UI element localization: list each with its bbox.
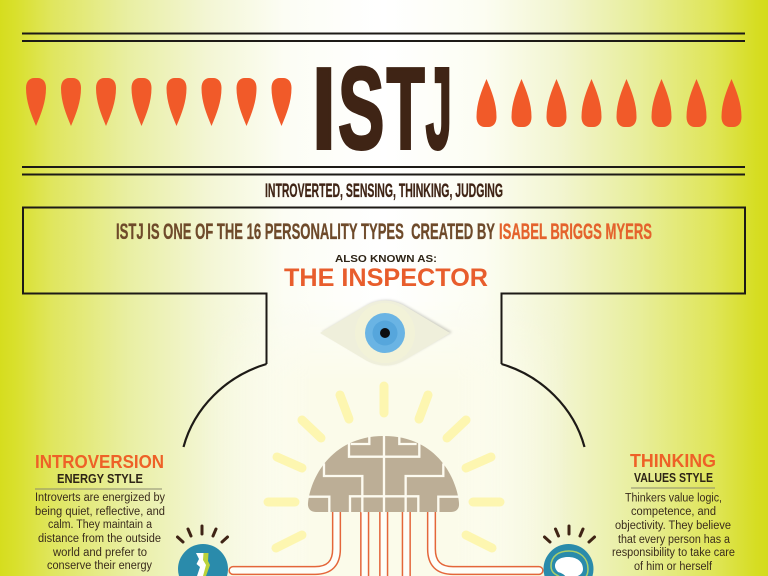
- intro sentence: ISTJ IS ONE OF THE 16 PERSONALITY TYPES CREATED BY: [116, 219, 495, 244]
- the inspector heading: THE INSPECTOR: [284, 264, 488, 292]
- brain glow rays: [268, 386, 500, 548]
- icon: circuit brain: [308, 436, 459, 512]
- icon: lightning bulb: [178, 526, 228, 576]
- title: S: [338, 44, 384, 174]
- icon: eye: [320, 300, 452, 366]
- thinking description: competence, and: [631, 506, 716, 518]
- introversion description: conserve their energy: [47, 560, 152, 572]
- introversion description: calm. They maintain a: [48, 519, 153, 531]
- introversion description: Introverts are energized by: [35, 492, 165, 504]
- thinking description: objectivity. They believe: [615, 520, 731, 532]
- energy style subheading: ENERGY STYLE: [57, 472, 143, 486]
- left row of orange drops: [26, 78, 292, 126]
- introversion description: world and prefer to: [52, 547, 147, 559]
- icon: thinking head: [544, 526, 594, 576]
- also known as label: ALSO KNOWN AS:: [335, 254, 437, 265]
- thinking description: [612, 492, 735, 573]
- top double rule: [22, 34, 745, 41]
- right row of orange drops: [476, 79, 742, 127]
- thinking description: of him or herself: [634, 561, 713, 573]
- introversion description: being quiet, reflective, and: [35, 506, 165, 518]
- intro sentence: ISABEL BRIGGS MYERS: [499, 219, 652, 244]
- title: [312, 44, 452, 174]
- outlined frame: [23, 208, 745, 447]
- subtitle: INTROVERTED, SENSING, THINKING, JUDGING: [265, 181, 503, 202]
- panel: introversion: [35, 452, 165, 572]
- title: T: [386, 44, 425, 173]
- thinking description: Thinkers value logic,: [625, 492, 722, 504]
- values style subheading: VALUES STYLE: [634, 471, 713, 485]
- thinking description: responsibility to take care: [612, 547, 735, 559]
- introversion description: distance from the outside: [38, 533, 161, 545]
- lower double rule: [22, 167, 745, 174]
- thinking description: that every person has a: [618, 534, 731, 546]
- introversion description: [35, 492, 165, 572]
- thinking heading: THINKING: [630, 451, 716, 471]
- wires: [233, 512, 539, 576]
- title: I: [312, 44, 336, 174]
- introversion heading: INTROVERSION: [35, 452, 164, 472]
- title: J: [426, 44, 452, 173]
- panel: thinking: [612, 451, 735, 573]
